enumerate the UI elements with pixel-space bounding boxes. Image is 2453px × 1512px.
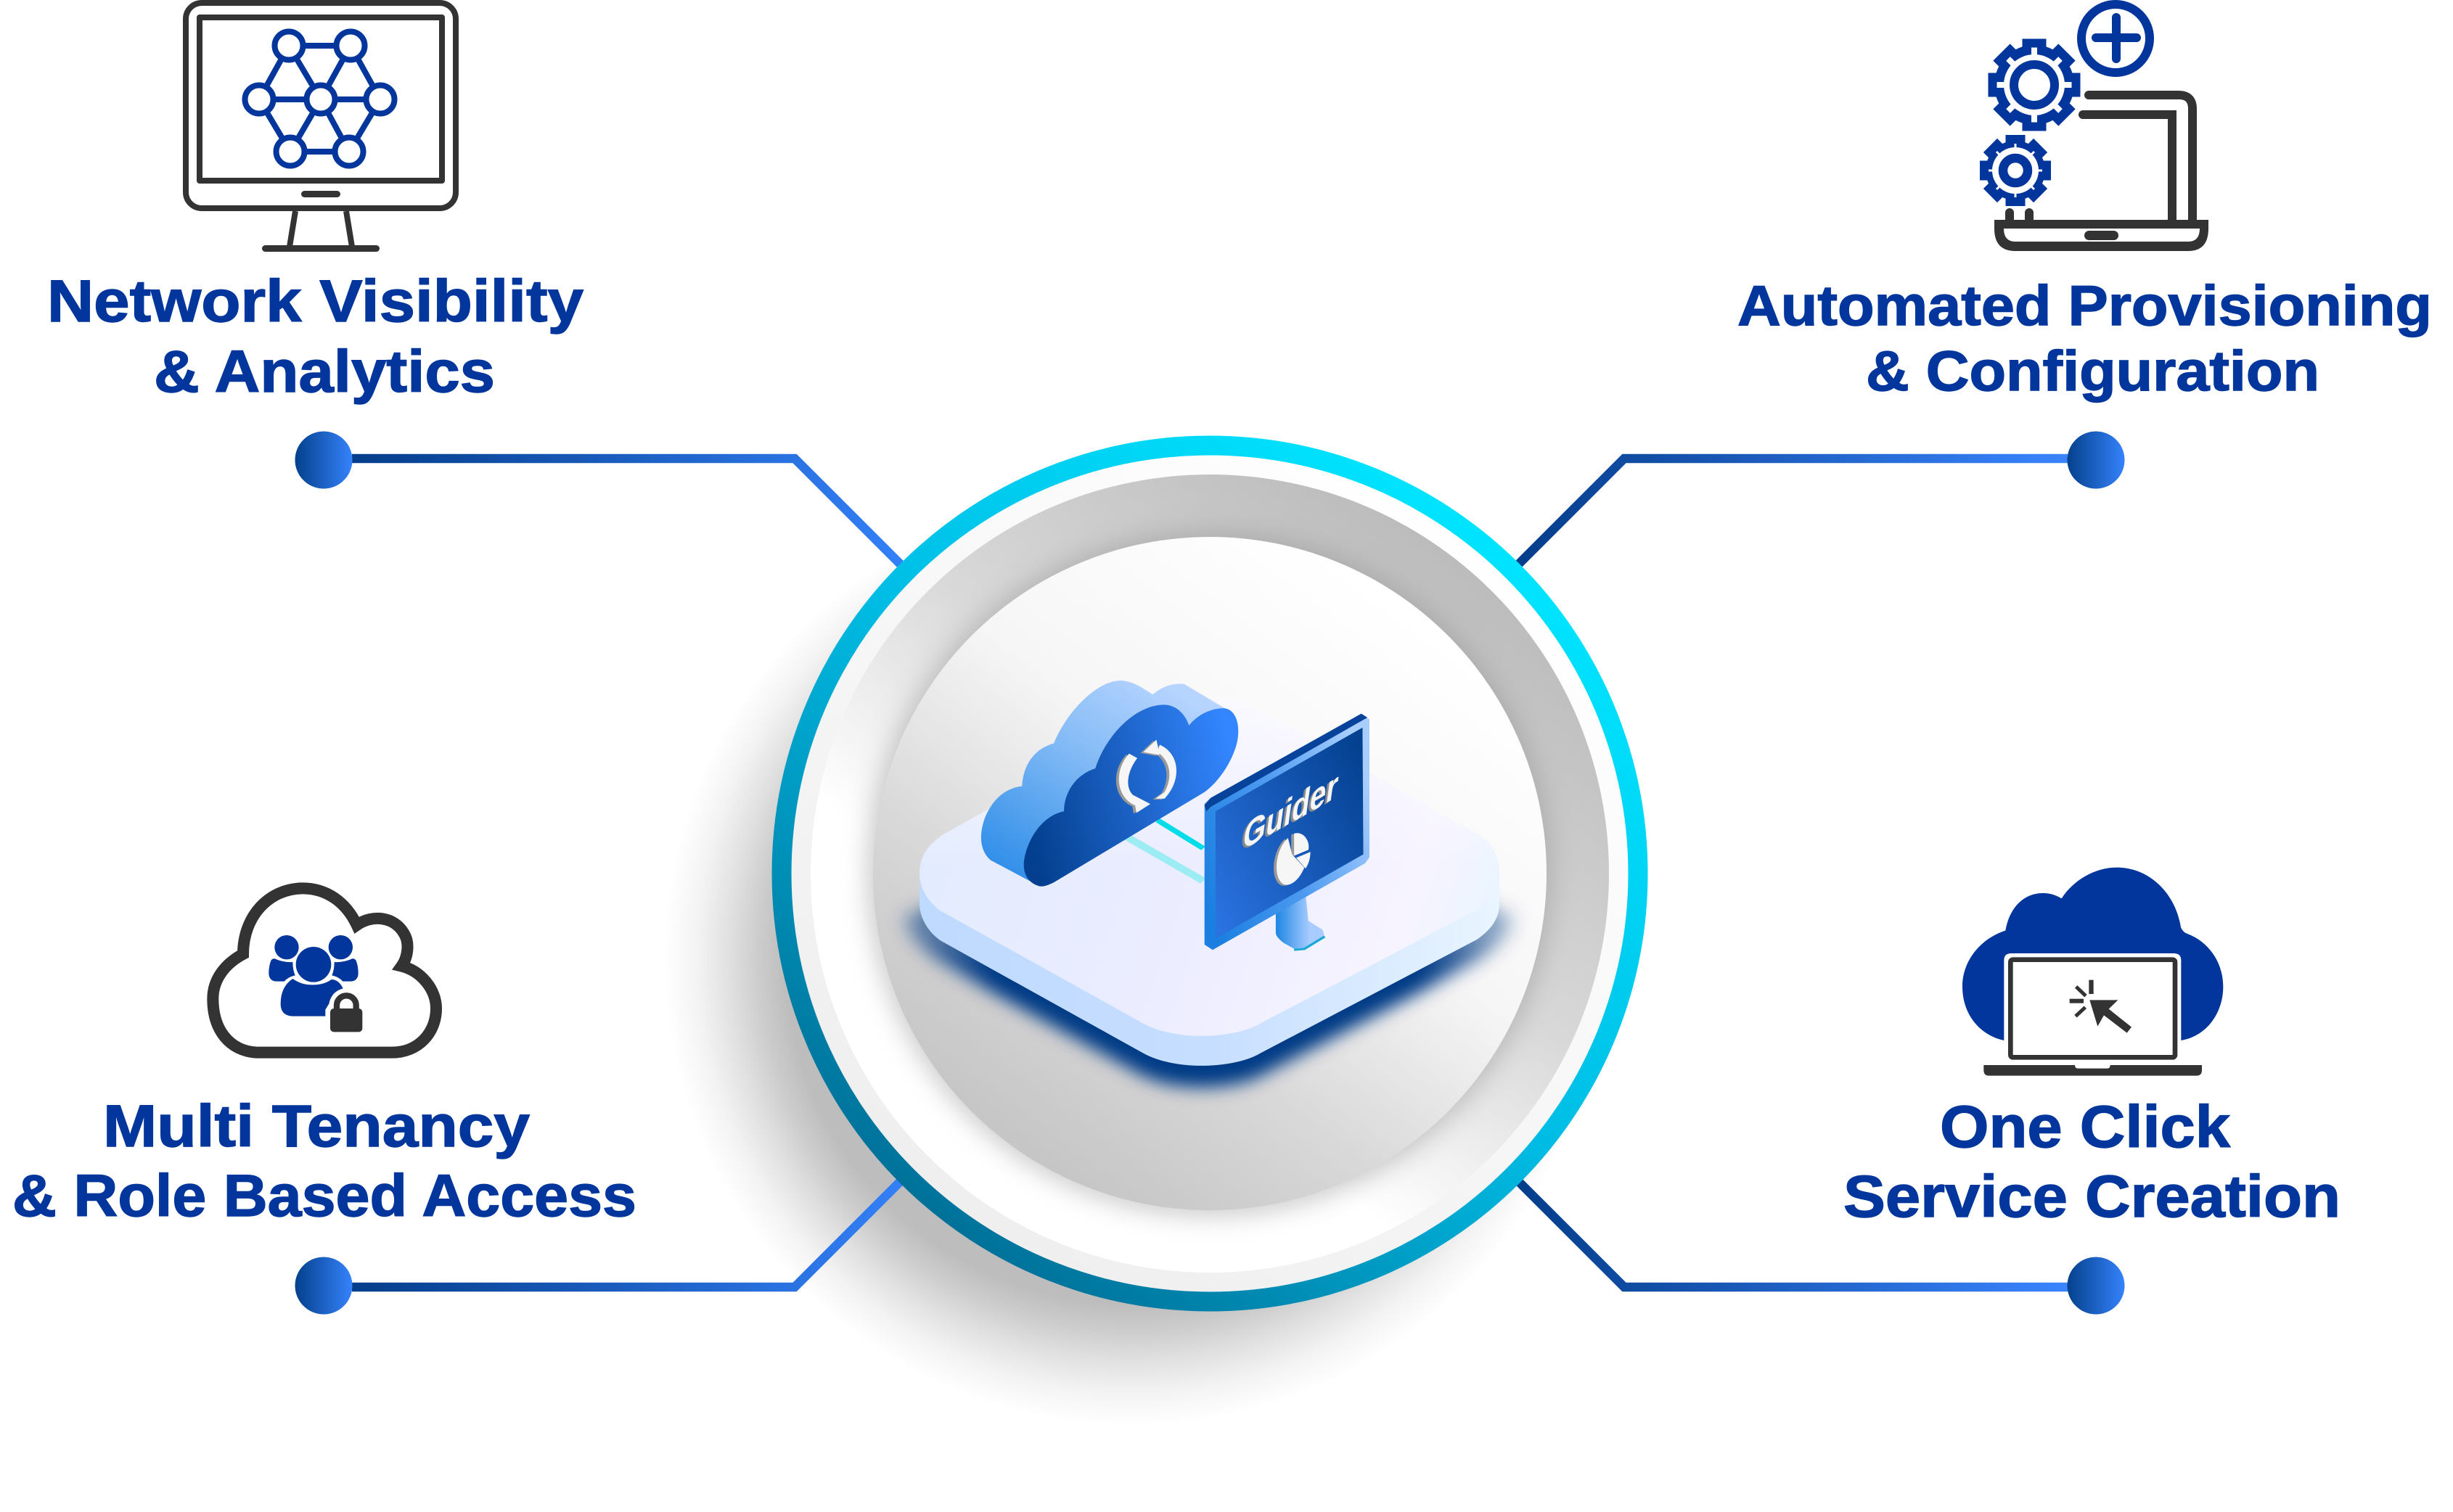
isometric platform: [912, 699, 1507, 1079]
connector: multi tenancy: [295, 1175, 907, 1315]
title: Multi Tenancy & Role Based Access: [12, 1093, 636, 1229]
title: One Click Service Creation: [1843, 1094, 2341, 1230]
isometric cloud with sync arrows: [981, 681, 1238, 887]
title: Multi Tenancy & Role Based Access: Multi Tenancy: [103, 1093, 530, 1159]
title: Automated Provisioning & Configuration: & Configuration: [1866, 339, 2319, 403]
drop shadow of central disc: [664, 490, 1600, 1426]
icon: cloud with laptop and cursor: [1962, 868, 2223, 1076]
title: Automated Provisioning & Configuration: [1737, 274, 2432, 403]
title: Network Visibility & Analytics: & Analytics: [154, 339, 495, 405]
title: Automated Provisioning & Configuration: Automated Provisioning: [1737, 274, 2432, 337]
title: One Click Service Creation: Service Creation: [1843, 1164, 2341, 1230]
connector: automated provisioning: [1515, 431, 2125, 567]
title: Network Visibility & Analytics: Network Visibility: [47, 268, 583, 334]
icon: laptop with gears and plus: [1980, 4, 2208, 251]
monitor label: Guider: Guider: [1240, 763, 1341, 859]
connector: one click: [1515, 1178, 2125, 1315]
icon: monitor with network: [186, 3, 456, 252]
connector beams between cloud and monitor: [1127, 821, 1203, 881]
title: One Click Service Creation: One Click: [1940, 1094, 2230, 1160]
connector: network visibility: [295, 431, 907, 571]
icon: cloud with users and lock: [213, 888, 436, 1053]
title: Network Visibility & Analytics: [47, 268, 583, 405]
isometric monitor: [1205, 714, 1369, 950]
title: Multi Tenancy & Role Based Access: & Role Based Access: [12, 1163, 636, 1229]
central disc: [782, 445, 1638, 1302]
